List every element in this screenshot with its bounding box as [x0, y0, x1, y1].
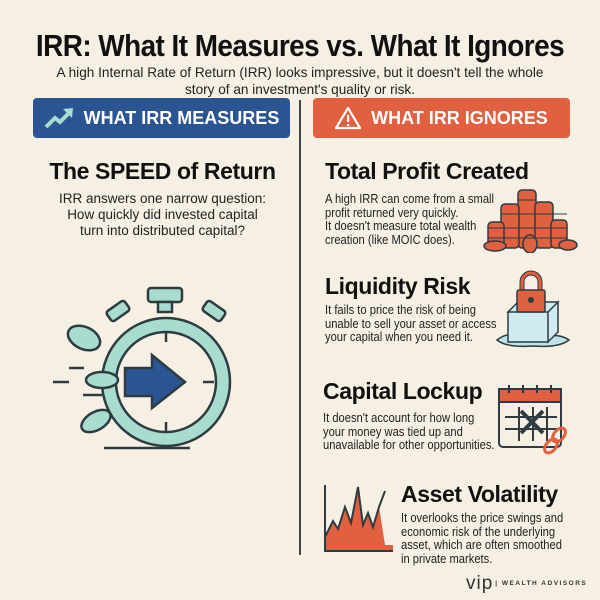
text: profit returned very quickly. [325, 204, 458, 220]
item: total profit [325, 158, 529, 246]
subtitle: A high Internal Rate of Return (IRR) looks impressive, but it doesn't tell the whole [57, 65, 543, 80]
text: creation (like MOIC does). [325, 232, 455, 246]
text: It doesn't measure total wealth [325, 218, 476, 233]
text: speed: IRR answers one narrow question: [59, 191, 266, 206]
icon: calendar with chain [498, 385, 567, 454]
text: speed [59, 191, 266, 238]
header: what irr measures: WHAT IRR MEASURES [84, 108, 279, 128]
heading: Asset Volatility [401, 481, 558, 507]
item: capital lockup [323, 378, 495, 452]
icon: coin stacks [483, 189, 578, 253]
subtitle: story of an investment's quality or risk. [185, 82, 415, 97]
title: IRR: What It Measures vs. What It Ignores [36, 28, 564, 63]
subtitle [56, 65, 543, 97]
icon: volatility chart [324, 485, 393, 552]
text: unable to sell your asset or access [325, 316, 497, 330]
item: liquidity risk [325, 273, 497, 344]
text: asset, which are often smoothed [401, 537, 562, 552]
icon: lock on ice [496, 270, 570, 348]
text: It doesn't account for how long [323, 410, 474, 425]
header: what irr measures [33, 98, 290, 138]
text: speed: turn into distributed capital? [80, 223, 245, 238]
heading: Liquidity Risk [325, 273, 470, 299]
header: what irr ignores [313, 98, 570, 138]
heading: Total Profit Created [325, 158, 529, 184]
text [325, 191, 494, 246]
heading: Capital Lockup [323, 378, 482, 404]
heading: speed of return: The SPEED of Return [49, 158, 276, 184]
text: in private markets. [401, 550, 492, 566]
text: economic risk of the underlying [401, 524, 555, 538]
text: speed: How quickly did invested capital [67, 207, 258, 222]
item: asset volatility [401, 481, 563, 566]
divider [299, 100, 301, 555]
text: your money was tied up and [323, 424, 463, 438]
text: A high IRR can come from a small [325, 191, 494, 206]
text: unavailable for other opportunities. [323, 437, 495, 452]
text [323, 410, 495, 452]
icon: stopwatch [53, 286, 232, 450]
logo: vip | WEALTH ADVISORS [466, 573, 587, 594]
header: what irr ignores: WHAT IRR IGNORES [371, 108, 548, 128]
text: your capital when you need it. [325, 329, 473, 344]
panel: measures [49, 158, 276, 238]
text [325, 302, 497, 344]
text: It overlooks the price swings and [401, 510, 563, 525]
text: It fails to price the risk of being [325, 302, 476, 317]
text [401, 510, 563, 566]
